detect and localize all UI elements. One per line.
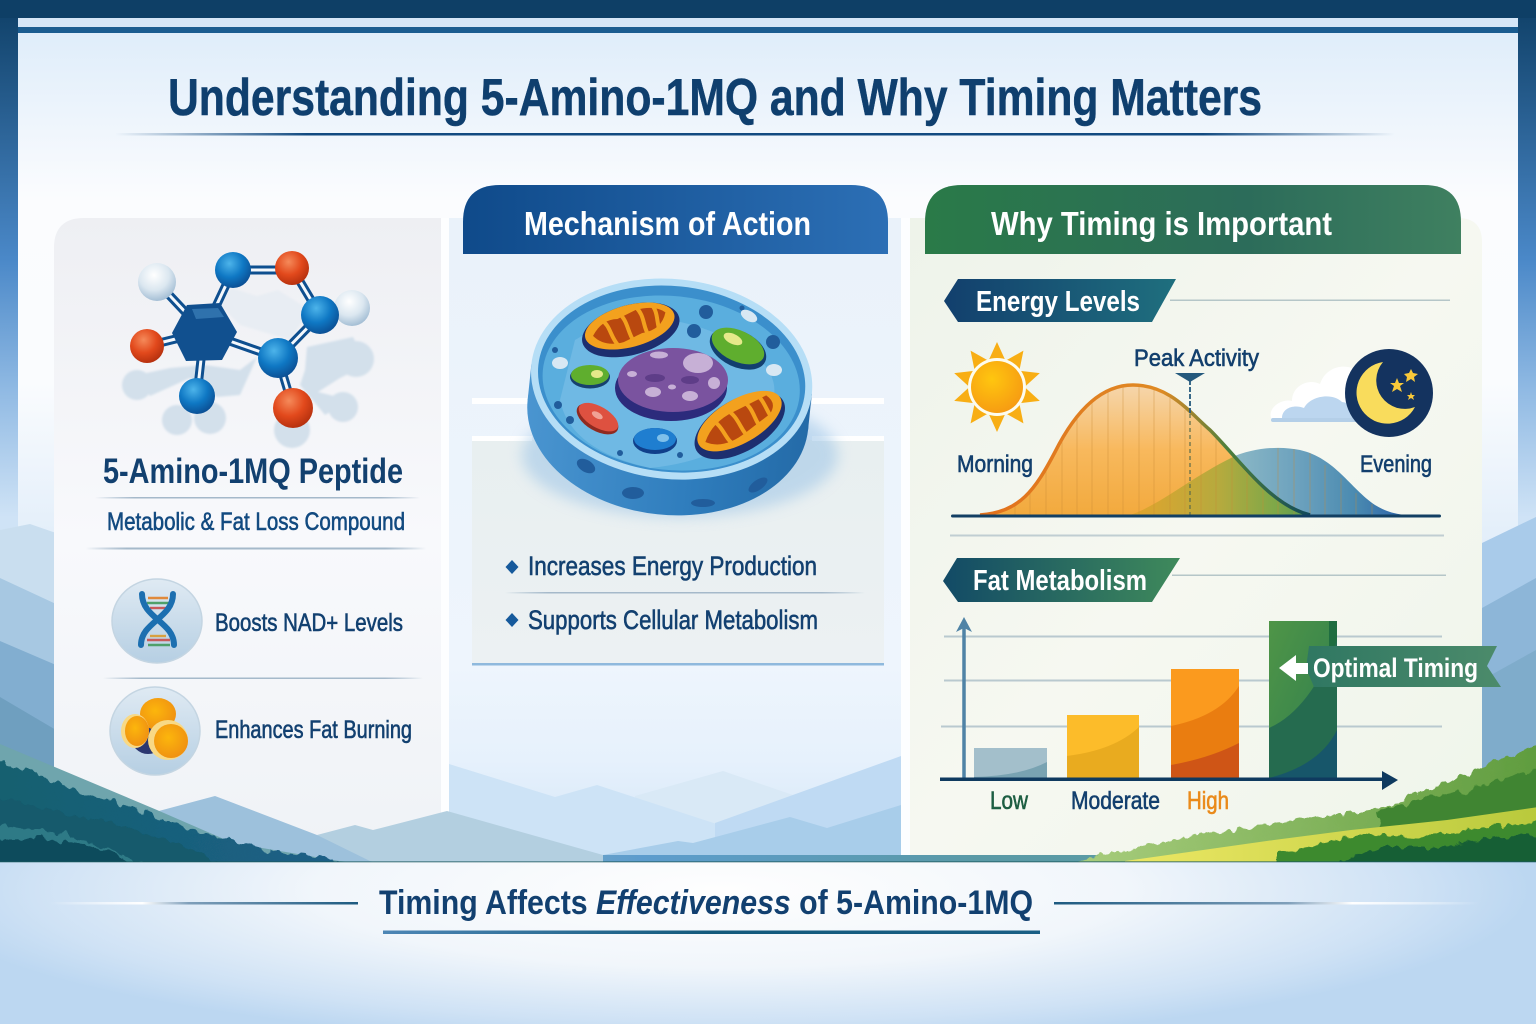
ribbon: energy levels (944, 279, 1176, 322)
bar: optimal (1269, 621, 1337, 779)
background mountains left (0, 524, 56, 862)
nucleus (615, 348, 728, 421)
bullet: energy production: Increases Energy Production (528, 551, 817, 581)
evening curve (1230, 448, 1410, 515)
molecule atoms (130, 251, 370, 428)
foreground strip along the band (420, 855, 1536, 862)
bar labels: High (1187, 787, 1229, 815)
callout: optimal timing (1279, 646, 1501, 687)
title underline (115, 133, 1395, 136)
foreground hills right (1077, 735, 1536, 875)
compound subtitle: Metabolic & Fat Loss Compound (107, 508, 405, 536)
cell lighter cytoplasm (560, 319, 774, 468)
background mountains right (1482, 517, 1536, 862)
header: why timing is important (925, 185, 1461, 254)
label: evening: Evening (1360, 451, 1432, 478)
header: mechanism of action: Mechanism of Action (524, 205, 811, 242)
red organelle (572, 397, 624, 441)
bullet: cellular metabolism: Supports Cellular Metabolism (528, 605, 818, 635)
bottom band (0, 861, 1536, 1024)
morning curve outline (980, 385, 1310, 515)
ribbon: fat metabolism (943, 558, 1180, 602)
molecule shadow (122, 288, 374, 448)
icon: molecule (122, 251, 374, 448)
icon: sun (951, 342, 1043, 432)
ribbon: energy levels: Energy Levels (976, 286, 1140, 318)
overlap (1130, 457, 1310, 515)
morning curve fill (980, 385, 1310, 515)
callout: optimal timing: Optimal Timing (1313, 653, 1478, 683)
cell body (517, 265, 822, 529)
benefit: enhances fat burning: Enhances Fat Burning (215, 716, 412, 744)
DNA strands (141, 594, 174, 645)
mechanism bullets (505, 551, 865, 635)
vertical hatch lines (1015, 386, 1372, 515)
green organelles (570, 320, 773, 388)
blue organelle (633, 428, 677, 454)
bar: low (974, 748, 1047, 779)
molecule hexagon core (172, 303, 237, 361)
mitochondrion upper (576, 293, 686, 367)
icon: cell illustration (517, 265, 838, 529)
title: Understanding 5-Amino-1MQ and Why Timing Matters (168, 69, 1262, 127)
bar labels (990, 787, 1229, 815)
mitochondrion lower (683, 378, 796, 473)
header: why timing is important: Why Timing is Important (991, 205, 1332, 242)
panel: compound (54, 218, 449, 860)
dividers left panel (86, 497, 426, 679)
cloud (1271, 367, 1380, 422)
baseline (951, 514, 1441, 518)
panel: mechanism of action (449, 218, 901, 858)
benefit: boosts NAD+: Boosts NAD+ Levels (215, 609, 403, 637)
footer lines (50, 902, 1480, 934)
label: morning: Morning (957, 451, 1033, 478)
chart: fat metabolism bars (940, 617, 1442, 790)
chart: energy curves (951, 373, 1441, 518)
peak marker (1175, 373, 1205, 515)
compound name: 5-Amino-1MQ Peptide (103, 452, 403, 491)
icon: fat cells (110, 687, 200, 775)
cell white vesicles (552, 307, 782, 376)
bar labels: Low (990, 787, 1029, 815)
panel: why timing is important (901, 218, 1482, 858)
bar: high (1171, 669, 1239, 779)
icon: DNA (112, 579, 202, 663)
ribbon: fat metabolism: Fat Metabolism (973, 565, 1147, 597)
DNA rungs (147, 598, 170, 645)
x axis (940, 778, 1385, 781)
cell spots (552, 305, 780, 507)
header: mechanism of action (463, 185, 888, 254)
molecule bonds (147, 268, 320, 408)
footer message: Timing Affects Effectiveness of 5-Amino-1MQ (379, 884, 1033, 922)
y axis (962, 624, 966, 779)
bar labels: Moderate (1071, 787, 1160, 815)
bar: moderate (1067, 715, 1139, 779)
label: peak activity: Peak Activity (1134, 345, 1259, 372)
foreground hills left (0, 744, 603, 875)
icon: moon and cloud (1271, 349, 1433, 437)
